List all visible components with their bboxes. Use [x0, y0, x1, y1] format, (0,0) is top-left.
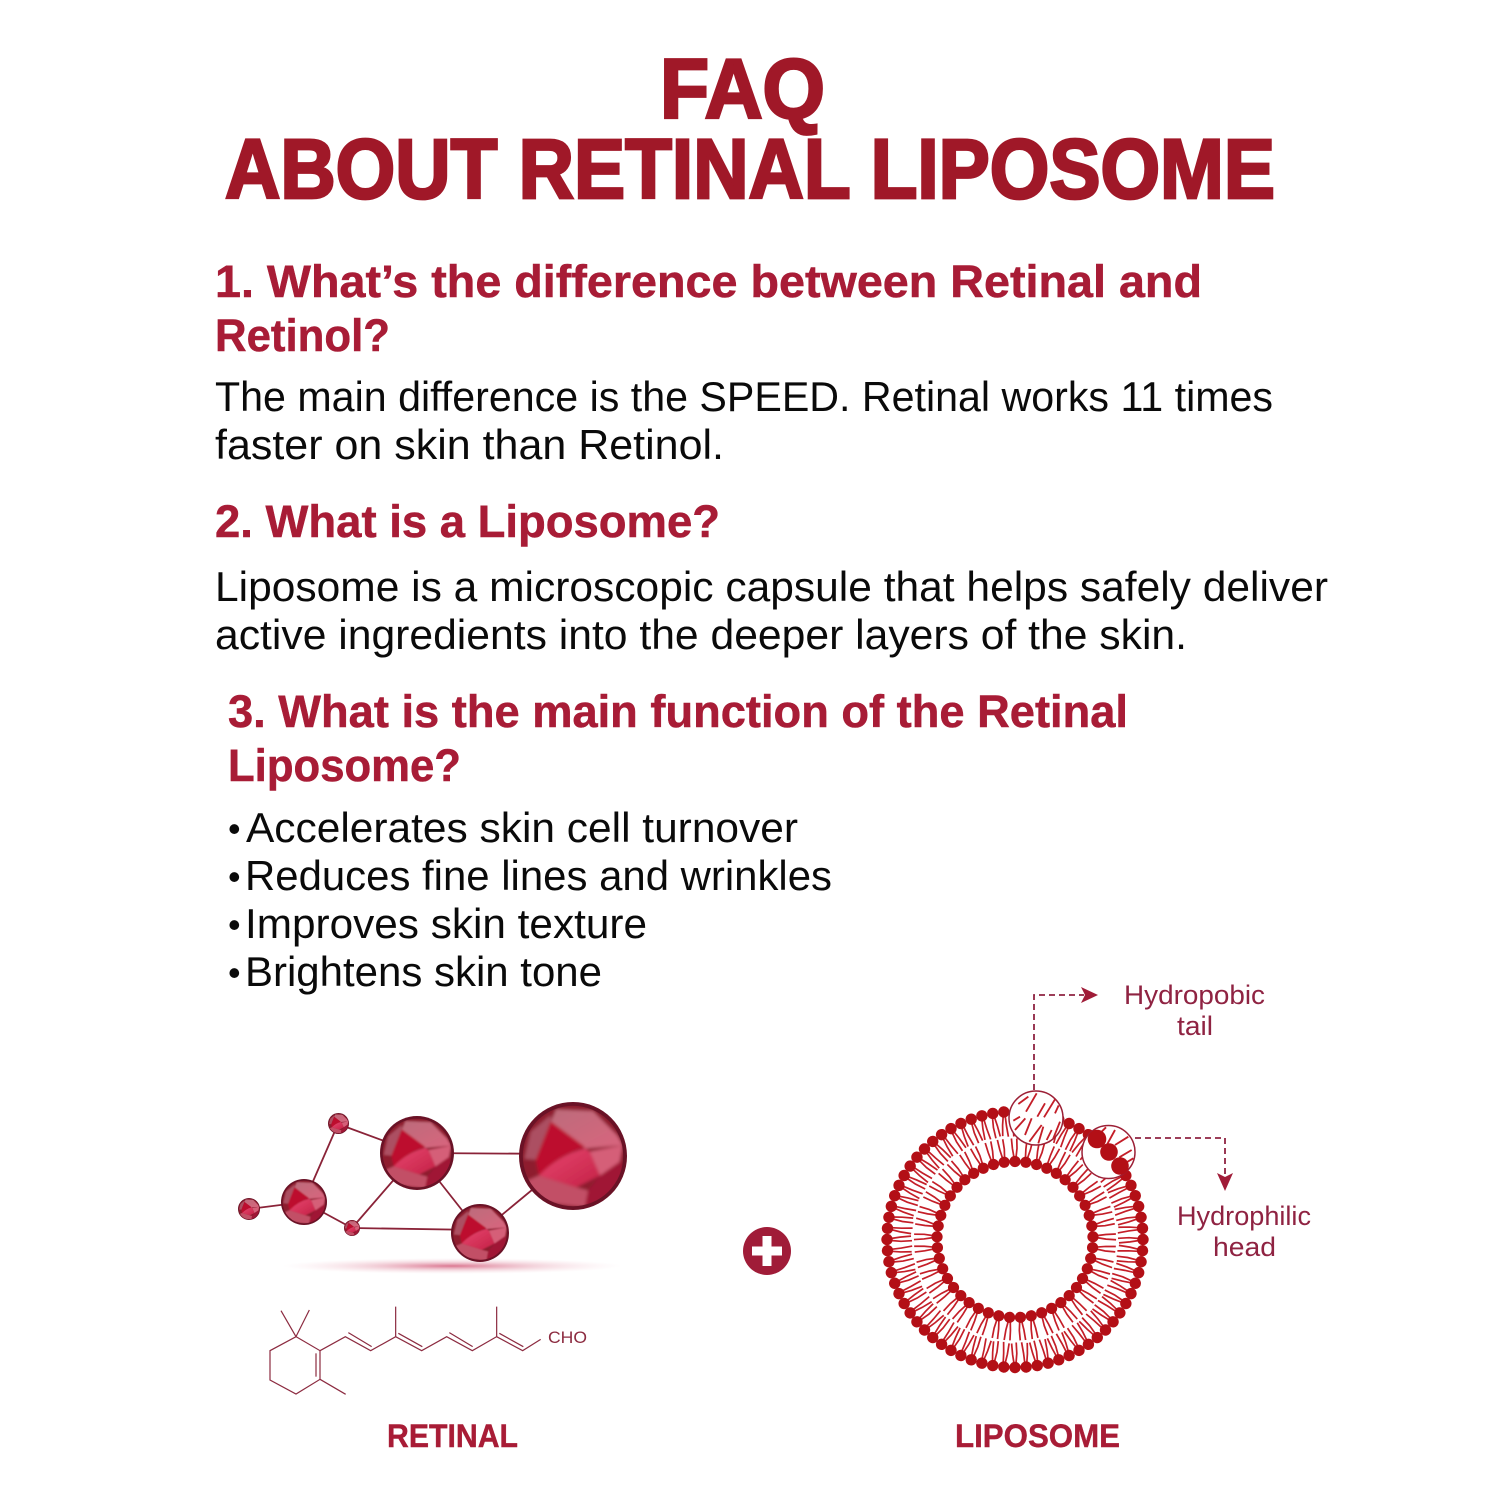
label: hydrophilic head	[1177, 1201, 1311, 1262]
bullet list of functions: •	[228, 856, 241, 897]
answer 1 text	[215, 373, 1273, 468]
bullet list of functions: •	[228, 808, 241, 849]
bullet list of functions: Brightens skin tone	[245, 948, 602, 995]
illustration: retinal molecule spheres	[238, 1102, 627, 1274]
answer 2 text: Liposome is a microscopic capsule that helps safely deliver	[215, 563, 1328, 610]
caption: retinal: RETINAL	[387, 1418, 518, 1454]
label: hydropobic tail: Hydropobic	[1124, 980, 1265, 1010]
bullet list of functions: •	[228, 952, 241, 993]
title: ABOUT RETINAL LIPOSOME	[225, 122, 1275, 216]
callout circle: tail detail	[1009, 1091, 1063, 1145]
question 1 heading: Retinol?	[215, 310, 390, 361]
question 3 heading	[228, 686, 1128, 791]
bullet list of functions: Improves skin texture	[245, 900, 647, 947]
question 3 heading: 3. What is the main function of the Retinal	[228, 686, 1128, 737]
label: hydropobic tail: tail	[1177, 1011, 1213, 1041]
answer 2 text: active ingredients into the deeper layers of the skin.	[215, 611, 1187, 658]
arrow: hydrophobic tail	[1034, 987, 1098, 1090]
icon: plus	[743, 1227, 791, 1275]
callout circle: head detail	[1082, 1126, 1135, 1178]
title: FAQ	[660, 42, 825, 136]
label: hydrophilic head: head	[1213, 1232, 1276, 1262]
retinal structural formula	[270, 1307, 587, 1394]
label: hydropobic tail	[1124, 980, 1265, 1041]
retinal structural formula: CHO	[548, 1328, 587, 1347]
question 3 heading: Liposome?	[228, 740, 461, 791]
caption: liposome: LIPOSOME	[955, 1418, 1120, 1454]
question 1 heading: 1. What’s the difference between Retinal and	[215, 256, 1202, 307]
answer 1 text: faster on skin than Retinol.	[215, 421, 724, 468]
title	[225, 42, 1275, 216]
bullet list of functions: Accelerates skin cell turnover	[246, 804, 798, 851]
answer 1 text: The main difference is the SPEED. Retinal works 11 times	[215, 373, 1273, 420]
illustration: liposome bilayer ring	[817, 1083, 1173, 1419]
question 2 heading: 2. What is a Liposome?	[215, 496, 720, 547]
bullet list of functions	[228, 804, 832, 995]
bullet list of functions: Reduces fine lines and wrinkles	[245, 852, 832, 899]
arrow: hydrophilic head	[1135, 1138, 1233, 1191]
label: hydrophilic head: Hydrophilic	[1177, 1201, 1311, 1231]
bullet list of functions: •	[228, 904, 241, 945]
question 1 heading	[215, 256, 1202, 361]
answer 2 text	[215, 563, 1328, 658]
